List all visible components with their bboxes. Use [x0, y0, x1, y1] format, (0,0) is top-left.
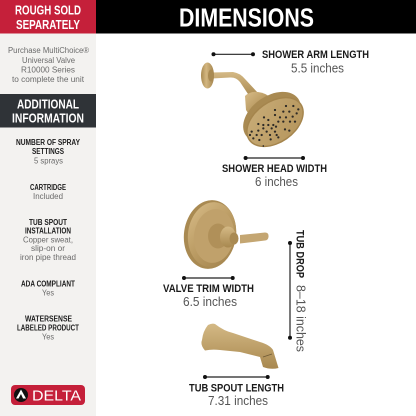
banner: additional information [0, 94, 96, 128]
spec: cartridge [30, 183, 66, 201]
dimension: shower head width: 6 inches [255, 175, 298, 189]
spec: tub spout installation [20, 218, 76, 262]
spec: spray settings [16, 138, 81, 166]
spec: tub spout installation: slip-on or [31, 244, 65, 253]
dimension: shower arm length [212, 49, 369, 76]
spec: spray settings: SETTINGS [32, 147, 65, 156]
banner: rough sold separately: ROUGH SOLD [15, 3, 81, 18]
spec: ada compliant: Yes [42, 288, 54, 298]
icon: shower head with arm [201, 62, 313, 158]
spec: spray settings: NUMBER OF SPRAY [16, 138, 81, 147]
spec: cartridge: CARTRIDGE [30, 183, 66, 192]
icon: valve trim [179, 197, 269, 272]
dimension: valve trim width: VALVE TRIM WIDTH [163, 283, 254, 295]
dimension: shower head width [222, 156, 327, 189]
dimension: shower head width: SHOWER HEAD WIDTH [222, 163, 327, 175]
spec: cartridge: Included [33, 192, 63, 201]
spec: watersense: Yes [42, 332, 54, 342]
logo: delta [11, 385, 85, 405]
dimension: tub spout length: 7.31 inches [208, 394, 268, 408]
dimension: valve trim width [163, 276, 254, 309]
spec: tub spout installation: Copper sweat, [23, 236, 73, 244]
dimension: tub drop: TUB DROP [294, 230, 306, 278]
spec: tub spout installation: iron pipe thread [20, 253, 76, 262]
spec: tub spout installation: TUB SPOUT [29, 218, 67, 227]
banner: rough sold separately [0, 0, 96, 34]
spec: tub spout installation: INSTALLATION [25, 227, 71, 236]
spec: ada compliant [21, 280, 75, 298]
dimension: tub drop [288, 230, 308, 352]
spec: ada compliant: ADA COMPLIANT [21, 280, 75, 289]
spec: watersense: WATERSENSE [25, 315, 73, 324]
dimension: tub spout length: TUB SPOUT LENGTH [189, 382, 284, 394]
text: purchase note: Universal Valve [22, 56, 76, 65]
panel: sidebar [0, 0, 96, 416]
dimension: shower arm length: SHOWER ARM LENGTH [262, 49, 369, 61]
icon: tub spout [201, 324, 278, 369]
text: purchase note: R10000 Series [21, 66, 75, 74]
banner: additional information: ADDITIONAL [17, 96, 79, 112]
spec: watersense: LABELED PRODUCT [17, 324, 79, 333]
text: purchase note: to complete the unit [12, 75, 85, 84]
dimension: tub spout length [189, 375, 284, 408]
spec: spray settings: 5 sprays [34, 156, 63, 166]
title bar: dimensions: DIMENSIONS [179, 2, 314, 32]
title bar: dimensions [96, 0, 416, 34]
spec: watersense [17, 315, 79, 342]
text: purchase note: Purchase MultiChoice® [8, 46, 89, 55]
banner: additional information: INFORMATION [12, 111, 84, 126]
dimension: shower arm length: 5.5 inches [291, 62, 344, 76]
text: purchase note [8, 46, 89, 84]
banner: rough sold separately: SEPARATELY [16, 17, 80, 32]
dimension: tub drop: 8–18 inches [294, 285, 308, 352]
dimension: valve trim width: 6.5 inches [183, 295, 237, 309]
logo: delta: DELTA [32, 388, 81, 404]
